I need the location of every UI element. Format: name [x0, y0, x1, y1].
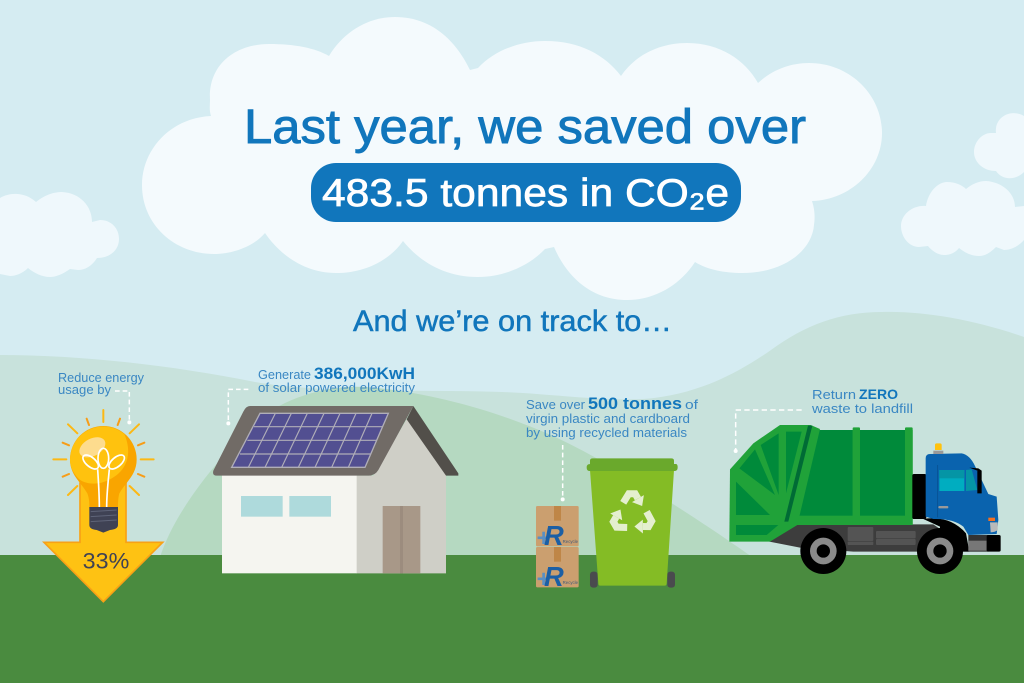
small cloud: upper right [974, 113, 1024, 178]
recycled materials label: by using recycled materials [526, 425, 688, 440]
solar label: Generate [258, 367, 311, 382]
zero waste label [811, 386, 913, 416]
icon: cardboard boxes and recycling bin: + [537, 525, 551, 552]
panel: zero waste [729, 386, 1001, 574]
highlight pill: 483.5 tonnes in CO₂e [322, 172, 729, 215]
panel: energy [44, 370, 163, 602]
icon: cardboard boxes and recycling bin: R [544, 520, 564, 551]
icon: garbage truck [729, 410, 1001, 574]
ground [0, 555, 1024, 683]
icon: house with solar panels [213, 389, 458, 573]
energy label: Reduce energy [58, 370, 144, 385]
energy label [58, 370, 144, 397]
icon: cardboard boxes and recycling bin: R [544, 561, 564, 592]
recycled materials label: of [685, 397, 698, 412]
main cloud [142, 17, 882, 300]
icon: light bulb with down arrow: 33% [83, 548, 129, 573]
title: Last year, we saved over [244, 101, 806, 154]
zero waste label: ZERO [859, 386, 898, 402]
icon: cardboard boxes and recycling bin [536, 445, 678, 593]
background hill: mid green [160, 387, 752, 557]
small cloud: lower right [901, 181, 1024, 256]
energy label: usage by [58, 382, 111, 397]
recycled materials label: virgin plastic and cardboard [526, 411, 690, 426]
subheading: And we’re on track to… [353, 305, 672, 338]
recycled materials label: 500 tonnes [588, 394, 682, 413]
solar label: of solar powered electricity [258, 380, 416, 395]
icon: cardboard boxes and recycling bin: Recycle [563, 580, 579, 585]
panel: solar [213, 364, 458, 573]
icon: cardboard boxes and recycling bin: Recycle [563, 539, 579, 544]
icon: cardboard boxes and recycling bin: + [537, 566, 551, 593]
background hill: light [0, 312, 1024, 560]
recycled materials label: Save over [526, 397, 586, 412]
small cloud: left [0, 192, 119, 277]
recycled materials label [526, 394, 698, 440]
solar label: 386,000KwH [314, 364, 415, 383]
solar label [258, 364, 416, 395]
zero waste label: waste to landfill [811, 401, 913, 416]
highlight pill [311, 163, 741, 222]
icon: light bulb with down arrow [44, 391, 163, 602]
zero waste label: Return [812, 387, 856, 402]
panel: recycled materials [526, 394, 698, 593]
